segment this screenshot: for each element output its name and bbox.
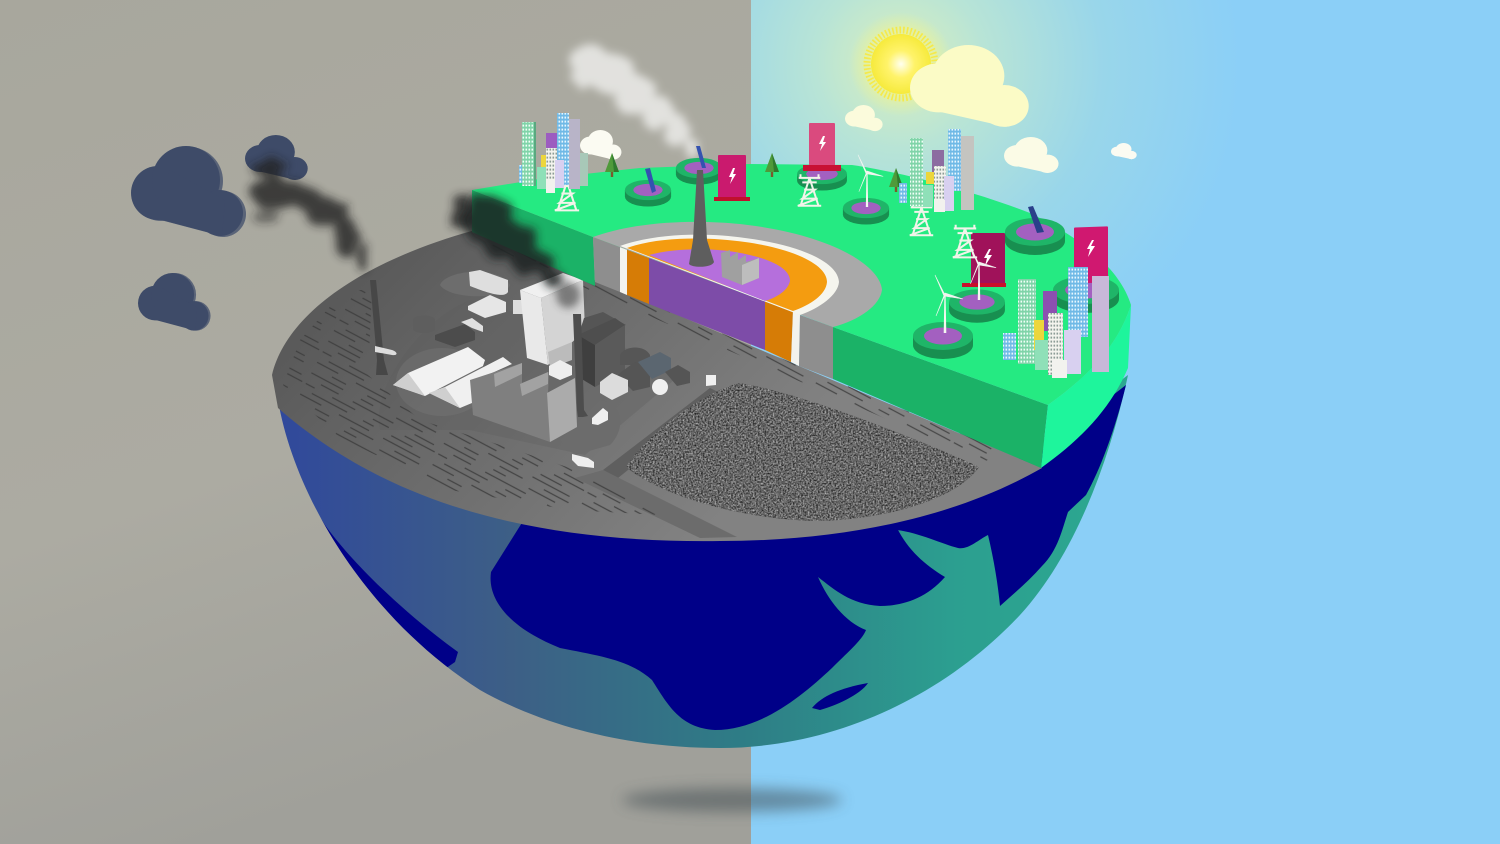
pad [913, 322, 973, 359]
pad [1053, 276, 1119, 313]
small blocks [620, 348, 650, 365]
dashed ground texture [283, 240, 1000, 515]
green clean-energy platform [472, 164, 1131, 468]
plant chimney [573, 314, 588, 417]
billboard 3 [962, 233, 1006, 287]
left ocean strip [320, 518, 458, 667]
solar panel [696, 146, 706, 168]
small factory on purple [721, 250, 759, 285]
dark storm clouds [131, 135, 308, 331]
battery billboards [714, 123, 1108, 287]
power plant buildings [370, 270, 716, 468]
billboard 4 [1074, 226, 1108, 283]
road and paved markings [379, 272, 737, 538]
pad [676, 158, 722, 185]
globe hemisphere [260, 375, 1128, 748]
white smoke plume [570, 44, 698, 158]
pad [625, 180, 671, 207]
dark smoke plumes [250, 159, 476, 271]
grey sawtooth factory [470, 363, 577, 442]
billboard 2 [803, 123, 841, 171]
central chimney [689, 170, 714, 267]
storage tank and blocks [413, 316, 435, 333]
city middle [899, 129, 974, 212]
background: polluted grey half [0, 0, 751, 844]
island [812, 683, 868, 710]
background: clean sky half [751, 0, 1500, 844]
pad [1005, 218, 1065, 255]
tower base units [548, 342, 572, 368]
dark block [578, 312, 626, 337]
wind turbines [858, 155, 996, 333]
sun [849, 12, 953, 116]
continent: large dark blue mass [491, 510, 945, 730]
pad [949, 289, 1005, 323]
ring: orange [627, 238, 827, 311]
billboard 1 [714, 155, 750, 201]
left chimney [370, 280, 388, 375]
dark smoke over platform [462, 194, 562, 285]
ring: white [620, 235, 839, 315]
city left [519, 113, 588, 193]
coal pile [626, 383, 979, 521]
solar panel [1028, 206, 1044, 233]
pale clouds [580, 45, 1137, 173]
right curved rim [1041, 305, 1131, 468]
platform side cut [472, 190, 595, 286]
shadow beneath globe [622, 788, 842, 812]
white tower [520, 273, 583, 298]
pylons [555, 174, 977, 257]
grey fossil-fuel disc [272, 230, 1042, 541]
trees [605, 153, 903, 192]
trucks [592, 408, 608, 425]
pad [797, 164, 847, 191]
city right [1003, 267, 1109, 378]
pad [843, 198, 889, 225]
solar and turbine pads [625, 146, 1119, 359]
white sheds [393, 347, 485, 396]
ring: grey [593, 222, 882, 327]
smoke staining tower [556, 282, 580, 308]
continent: upper right dark blue mass [880, 385, 1126, 606]
platform top [472, 164, 1131, 405]
ring: purple [649, 249, 790, 301]
solar panel [645, 168, 656, 193]
